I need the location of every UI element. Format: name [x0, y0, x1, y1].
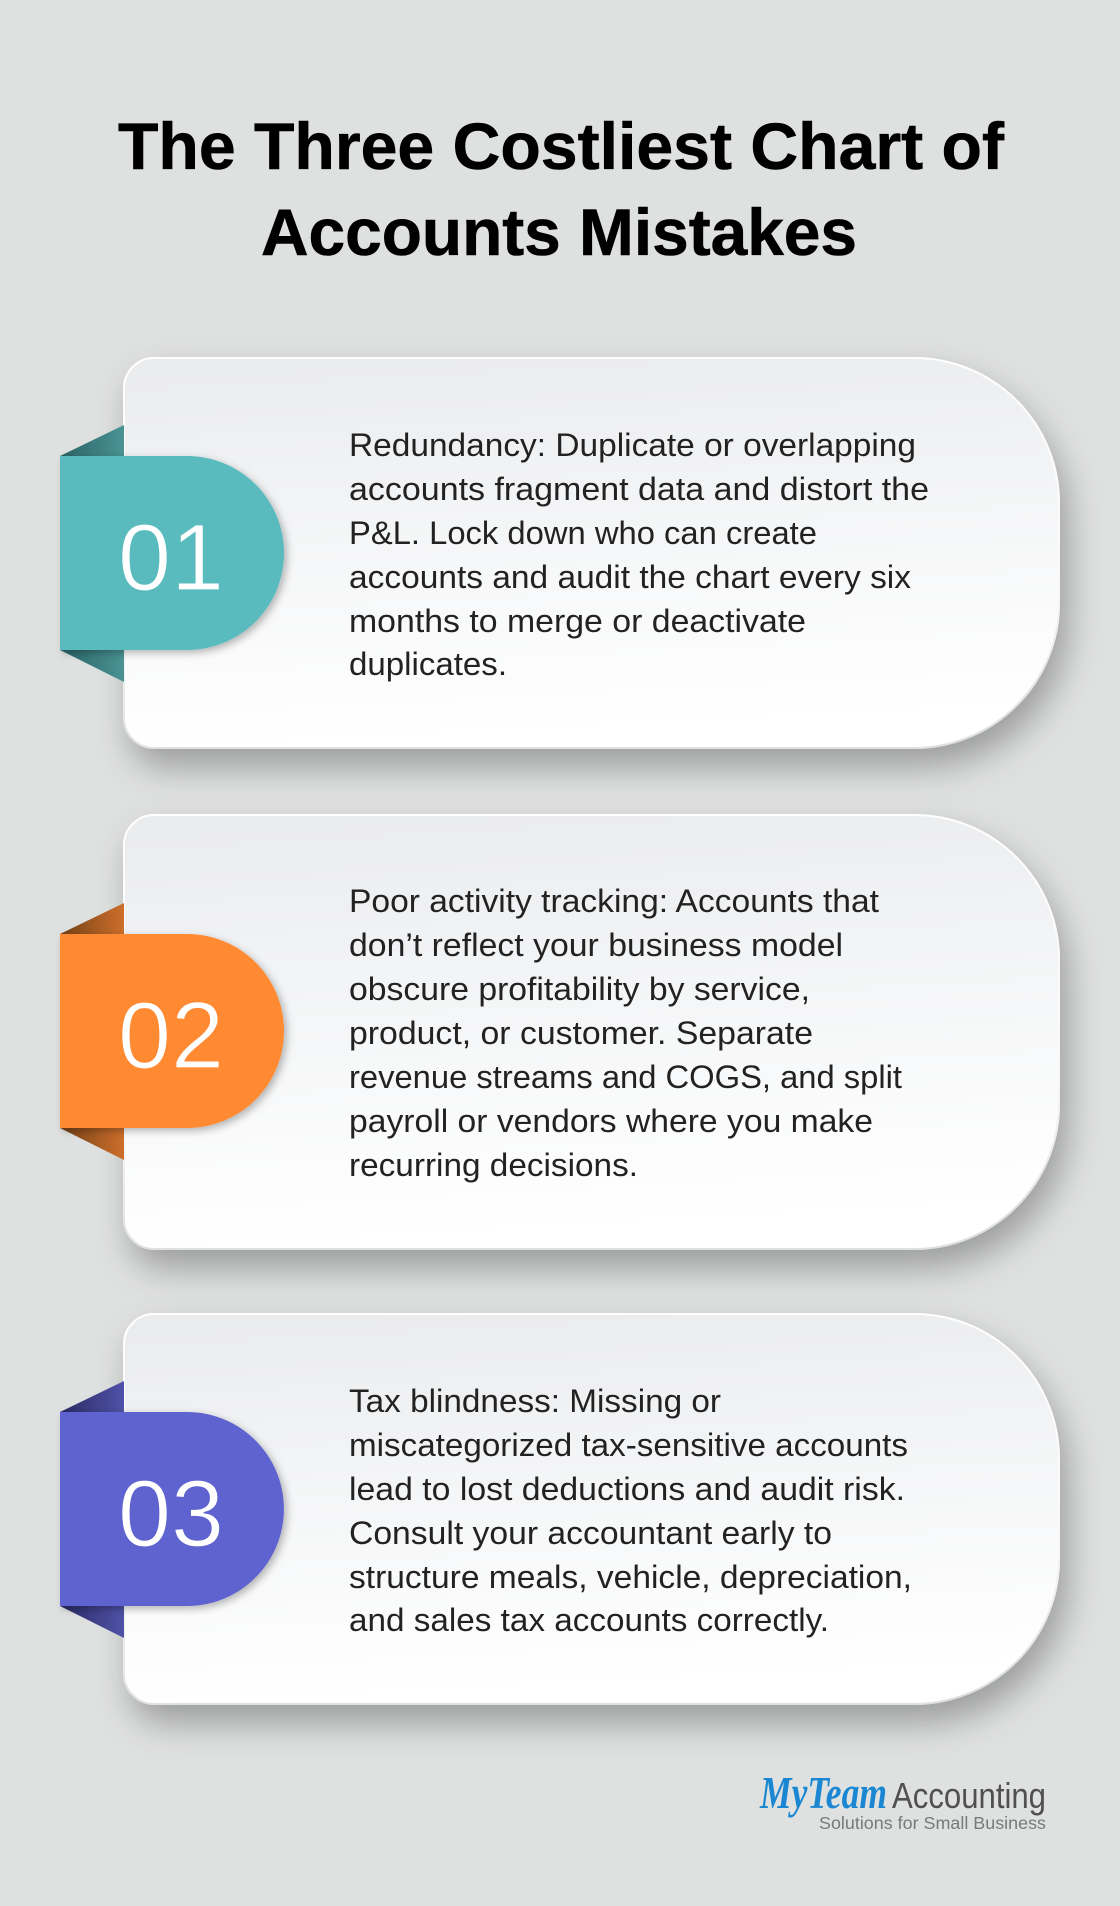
ribbon fold bottom 1 — [60, 650, 124, 682]
ribbon fold bottom 3 — [60, 1606, 124, 1638]
body text 1: accounts and audit the chart every six — [349, 559, 911, 595]
number tab 01 — [60, 456, 284, 650]
title: Accounts Mistakes — [261, 195, 857, 269]
body text 3: miscategorized tax-sensitive accounts — [349, 1427, 908, 1463]
body text 1: P&L. Lock down who can create — [349, 515, 817, 551]
body text 2: product, or customer. Separate — [349, 1015, 813, 1051]
ribbon fold bottom 2 — [60, 1128, 124, 1160]
card background 2 — [124, 815, 1059, 1249]
body text 2: recurring decisions. — [349, 1147, 638, 1183]
number 01: 01 — [118, 505, 224, 611]
body text 2 — [349, 883, 902, 1183]
body text 1: Redundancy: Duplicate or overlapping — [349, 427, 916, 463]
logo — [759, 1767, 1046, 1833]
ribbon fold top 3 — [60, 1381, 124, 1412]
body text 1 — [349, 427, 929, 682]
card background 1 — [124, 358, 1059, 748]
body text 3: lead to lost deductions and audit risk. — [349, 1471, 905, 1507]
body text 2: revenue streams and COGS, and split — [349, 1059, 902, 1095]
logo: MyTeam — [759, 1767, 887, 1818]
body text 3: Consult your accountant early to — [349, 1515, 832, 1551]
number 03: 03 — [118, 1461, 224, 1567]
ribbon fold top 2 — [60, 903, 124, 934]
title: The Three Costliest Chart of — [118, 109, 1005, 183]
body text 1: duplicates. — [349, 646, 507, 682]
body text 2: obscure profitability by service, — [349, 971, 810, 1007]
body text 3: and sales tax accounts correctly. — [349, 1602, 829, 1638]
logo: Solutions for Small Business — [819, 1813, 1046, 1833]
card background 3 — [124, 1314, 1059, 1704]
body text 1: months to merge or deactivate — [349, 603, 806, 639]
body text 3 — [349, 1383, 912, 1638]
logo: Accounting — [892, 1775, 1046, 1816]
ribbon fold top 1 — [60, 425, 124, 456]
panel: mistake 1 redundancy — [60, 358, 1059, 748]
panel: mistake 3 tax blindness — [60, 1314, 1059, 1704]
title — [118, 109, 1005, 269]
body text 1: accounts fragment data and distort the — [349, 471, 929, 507]
body text 2: don’t reflect your business model — [349, 927, 843, 963]
number tab 03 — [60, 1412, 284, 1606]
body text 3: structure meals, vehicle, depreciation, — [349, 1559, 912, 1595]
panel: mistake 2 poor activity tracking — [60, 815, 1059, 1249]
number 02: 02 — [118, 983, 224, 1089]
body text 3: Tax blindness: Missing or — [349, 1383, 721, 1419]
body text 2: payroll or vendors where you make — [349, 1103, 873, 1139]
number tab 02 — [60, 934, 284, 1128]
body text 2: Poor activity tracking: Accounts that — [349, 883, 879, 919]
